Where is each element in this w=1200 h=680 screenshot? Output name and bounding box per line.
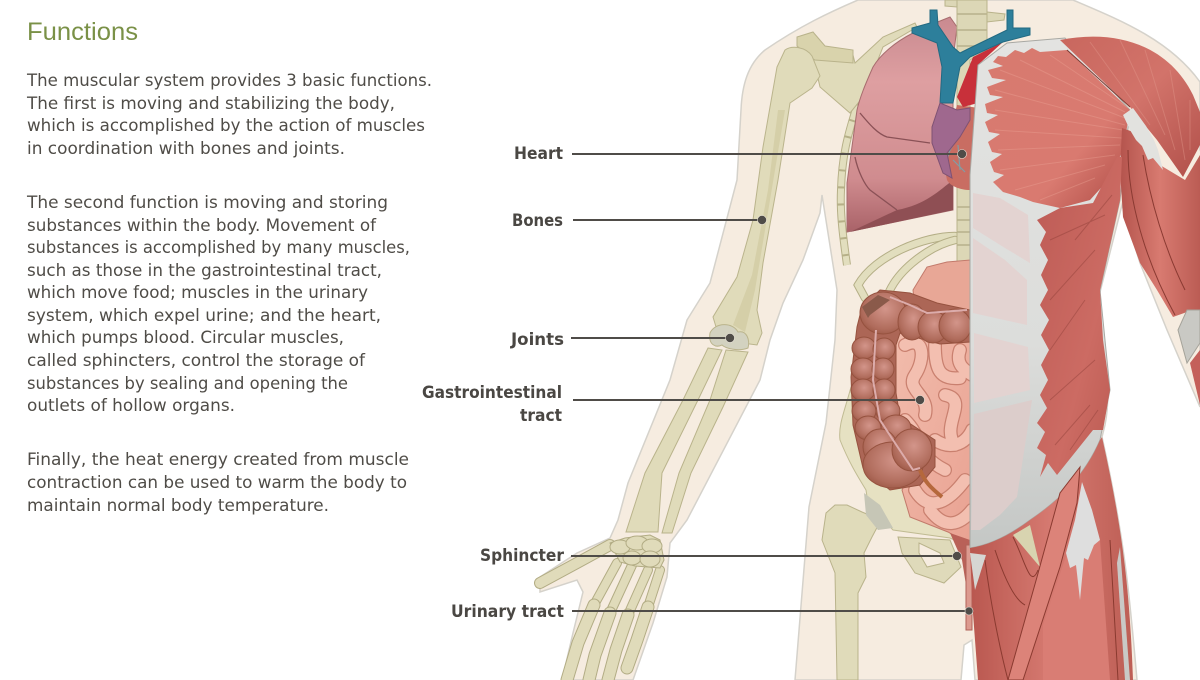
deltoid fibers	[1090, 40, 1190, 160]
bones: hand	[540, 545, 660, 680]
heart	[943, 105, 978, 190]
external oblique and serratus muscle	[1037, 157, 1122, 477]
urethra	[966, 545, 972, 630]
text block: second function: system, which expel urine; and the heart,	[27, 306, 381, 326]
text block: second function: such as those in the gastrointestinal tract,	[27, 261, 382, 281]
appendix	[920, 470, 942, 497]
sartorius	[1008, 467, 1080, 680]
bone: scapula and clavicle	[813, 23, 917, 113]
deltoid border line	[1067, 50, 1130, 107]
bone: humerus	[713, 47, 820, 345]
label: Joints	[510, 330, 734, 350]
joint: elbow	[710, 325, 749, 350]
bone: cartilage chain	[841, 57, 873, 265]
title: Functions	[27, 18, 138, 46]
biceps and arm muscle	[1120, 128, 1200, 317]
spine	[957, 0, 987, 265]
right atrium	[932, 103, 970, 178]
arm muscle divisions	[1128, 150, 1185, 315]
tensor fasciae tendon	[1066, 482, 1100, 600]
groin tendon	[970, 553, 986, 590]
abdominal fascia	[970, 38, 1130, 548]
coronary vessels	[945, 130, 965, 172]
body silhouette	[540, 0, 1200, 680]
lateral band	[1117, 547, 1130, 680]
shaft shading	[733, 110, 785, 332]
arm skin gap	[1190, 150, 1200, 167]
hip joint	[864, 493, 893, 530]
adductor lines	[985, 537, 1118, 680]
bone: ischium ring	[898, 537, 961, 583]
sphincter muscle	[950, 533, 973, 585]
stomach	[913, 260, 970, 320]
bone: pelvis	[840, 387, 972, 548]
text block: third function: contraction can be used to warm the body to	[27, 473, 407, 493]
label: Gastrointestinal tract: Gastrointestinal	[422, 383, 562, 403]
bone: femur	[822, 505, 881, 680]
bone: ulna	[662, 350, 748, 533]
aorta	[957, 42, 1003, 107]
large intestine	[851, 290, 971, 490]
bone: acromion	[797, 32, 853, 63]
shoulder tendon	[1123, 108, 1163, 170]
text block: first function: The first is moving and stabilizing the body,	[26, 94, 395, 114]
text block: second function: The second function is moving and storing	[26, 193, 388, 213]
label: Urinary tract: Urinary tract	[451, 602, 564, 622]
text block: second function: called sphincters, control the storage of	[27, 351, 366, 371]
lung	[847, 17, 957, 232]
superior vena cava and branches	[912, 10, 1030, 103]
pectoralis fibers	[995, 55, 1128, 200]
label: Heart: Heart	[514, 144, 563, 164]
label: Gastrointestinal tract: tract	[520, 406, 562, 426]
intestinal loops	[905, 343, 972, 523]
label: Heart	[514, 144, 966, 164]
elbow tendon	[1178, 310, 1200, 363]
text block: second function: substances by sealing and opening the	[27, 374, 348, 394]
text block: third function: maintain normal body temperature.	[27, 496, 329, 516]
oblique fibers	[1050, 195, 1112, 450]
cervical processes	[945, 0, 1005, 22]
vertebra lines	[957, 14, 987, 245]
text block: first function: which is accomplished by the action of muscles	[27, 116, 425, 136]
small intestine	[893, 320, 972, 545]
bones: wrist carpals	[610, 535, 664, 568]
label: Sphincter	[480, 546, 962, 566]
text block: second function: outlets of hollow organs.	[27, 396, 235, 416]
text block: first function	[26, 71, 432, 159]
colon base	[851, 290, 970, 490]
colon shadow patch	[862, 295, 890, 318]
rectus femoris	[1043, 540, 1110, 680]
forearm muscle	[1190, 350, 1200, 405]
bone: ribs	[858, 236, 955, 298]
label: Joints: Joints	[510, 330, 564, 350]
anatomy illustration	[540, 0, 1200, 680]
bone: radius	[626, 348, 722, 532]
text block: second function: which move food; muscles in the urinary	[27, 283, 368, 303]
label: Bones: Bones	[512, 211, 563, 231]
pectoralis major muscle	[985, 48, 1130, 208]
text block: first function: in coordination with bones and joints.	[27, 139, 345, 159]
text block: second function	[26, 193, 410, 416]
text block: first function: The muscular system provides 3 basic functions.	[26, 71, 432, 91]
text block: second function: substances within the body. Movement of	[27, 216, 377, 236]
lung fissures	[855, 113, 930, 210]
label: Bones	[512, 211, 766, 231]
text block: second function: substances is accomplished by many muscles,	[27, 238, 410, 258]
text block: third function: Finally, the heat energy created from muscle	[27, 450, 409, 470]
text block: second function: which pumps blood. Circular muscles,	[27, 328, 344, 348]
label: Urinary tract	[451, 602, 973, 622]
lung base	[850, 180, 953, 232]
label: Gastrointestinal tract	[422, 383, 924, 426]
label: Sphincter: Sphincter	[480, 546, 565, 566]
thigh muscles	[970, 437, 1133, 680]
pelvis bone gap	[1013, 525, 1040, 567]
taenia bands	[873, 297, 967, 470]
text block: third function	[27, 450, 409, 516]
rectus abdominis panels	[971, 193, 1032, 530]
deltoid muscle	[1060, 37, 1200, 177]
